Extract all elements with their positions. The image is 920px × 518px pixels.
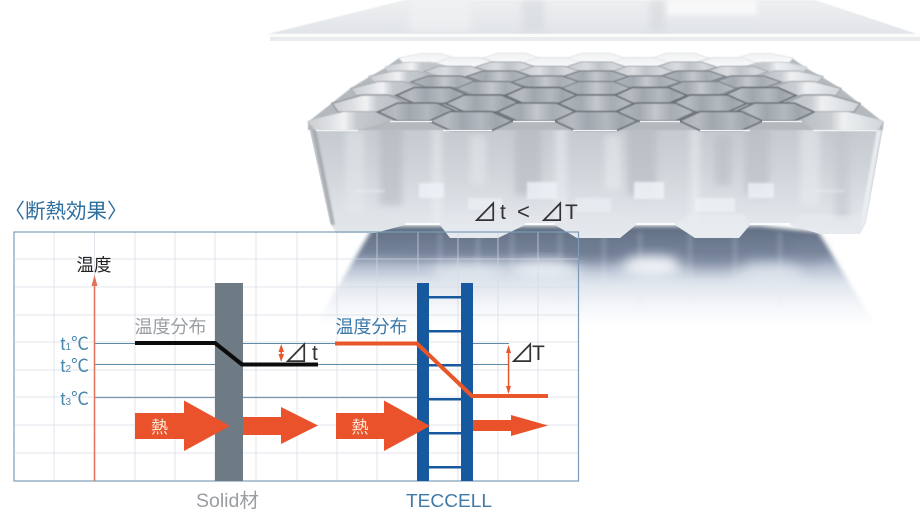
temperature reference lines (95, 344, 509, 364)
delta T label: T (532, 342, 545, 365)
wall stripes and refractions (313, 125, 880, 238)
delta t label: ⊿ (284, 334, 309, 370)
temperature axis (92, 275, 98, 481)
teccell structure (417, 283, 473, 481)
hex cell rows centre (351, 71, 841, 96)
solid temperature label: 温度分布 (134, 317, 206, 337)
hex cell rows middle (385, 62, 807, 77)
delta T arrow (506, 345, 511, 394)
shadow beneath honeycomb (316, 226, 875, 324)
heading: 〈断熱効果〉 (4, 200, 128, 223)
temperature labels: t2℃ (60, 352, 89, 378)
axis title: 温度 (76, 255, 112, 275)
honeycomb block (307, 53, 884, 238)
hex cell rows front (307, 88, 884, 130)
t3 reference line (95, 396, 417, 398)
heat label: 熱 (151, 418, 168, 437)
temperature labels: t1℃ (60, 330, 89, 356)
comparison label: < (517, 199, 530, 224)
solid label: Solid材 (196, 490, 259, 512)
delta t label: t (312, 342, 318, 365)
hex front edge highlights (316, 122, 877, 130)
comparison label: t (500, 201, 506, 224)
panel: chart (14, 232, 578, 512)
top cover panel (268, 0, 920, 41)
comparison label: ⊿ (472, 193, 498, 229)
honeycomb top surface (308, 58, 883, 130)
heat arrow into solid (135, 400, 230, 451)
teccell label: TECCELL (406, 491, 492, 511)
heat arrow out of solid (243, 407, 318, 444)
hex cell rows back (399, 53, 793, 68)
delta t arrow (278, 344, 284, 362)
temperature labels (60, 330, 89, 411)
temperature labels: t3℃ (60, 385, 89, 411)
comparison label: ⊿ (540, 193, 565, 229)
teccell temperature label: 温度分布 (336, 317, 408, 337)
comparison label: T (565, 201, 578, 224)
heat arrow into teccell (336, 400, 430, 451)
comparison label (472, 193, 578, 229)
heat label: 熱 (352, 418, 368, 437)
honeycomb front walls (308, 122, 884, 238)
solid material bar (215, 283, 243, 481)
delta T label: ⊿ (510, 334, 535, 370)
heat arrow out of teccell (473, 415, 548, 436)
solid temperature line (135, 343, 318, 364)
teccell temperature line (335, 344, 548, 396)
